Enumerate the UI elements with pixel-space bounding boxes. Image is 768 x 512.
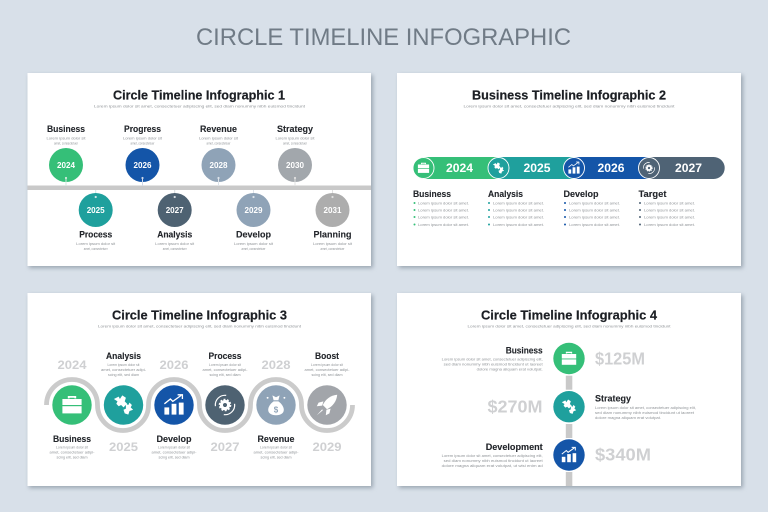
step: Business 2024: 2024 — [58, 358, 87, 372]
panel: circle timeline 3 — [28, 293, 373, 488]
milestone: Revenue 2028: Revenue — [200, 124, 237, 135]
column: Target — [638, 189, 695, 227]
milestone: Analysis 2027: Lorem ipsum dolor sit — [155, 241, 195, 246]
column: Business — [413, 189, 469, 227]
step: Boost 2029: Boost — [315, 351, 340, 362]
row: Development $340M — [442, 439, 651, 471]
column: Analysis: Analysis — [488, 189, 523, 200]
step: Analysis 2025: Analysis — [106, 351, 141, 362]
panel 4 subtitle: Lorem ipsum dolor sit amet, consectetuer adipiscing elit, sed diam nonummy nibh euismod tincidunt — [468, 324, 672, 328]
panel: circle timeline 4 — [397, 293, 743, 488]
step: Boost 2029 — [304, 351, 350, 454]
milestone: Strategy 2030: amet, consectetuer — [283, 140, 307, 146]
milestone: Business 2024: Lorem ipsum dolor sit — [46, 136, 86, 140]
column: Target: Lorem ipsum dolor sit amet. — [644, 214, 695, 220]
column: Analysis — [488, 189, 544, 227]
milestone: Analysis 2027 — [155, 190, 195, 251]
milestone: Process 2025: 2025 — [87, 205, 105, 215]
milestone: Revenue 2028: Lorem ipsum dolor sit — [199, 136, 239, 140]
milestone: Develop 2029: amet, consectetuer — [242, 246, 266, 251]
row: Strategy $270M: sed diam nonummy nibh euismod tincidunt ut laoreet — [595, 410, 695, 415]
step: Revenue 2028: $ — [274, 406, 279, 414]
milestone: Strategy 2030 — [276, 124, 315, 186]
row: Strategy $270M: dolore magna aliquam erat volutpat. — [595, 415, 661, 420]
milestone: Business 2024: Business — [47, 124, 85, 135]
step: Develop 2026: Lorem ipsum dolor sit — [158, 444, 191, 450]
row: Development $340M: sed diam nonummy nibh euismod tincidunt ut laoreet — [444, 458, 544, 463]
milestone: Analysis 2027: amet, consectetuer — [163, 246, 187, 251]
segment 2025: 2025 — [524, 161, 551, 175]
segment 2027 — [638, 158, 702, 178]
milestone: Process 2025: amet, consectetuer — [84, 246, 108, 251]
milestone: Strategy 2030: 2030 — [286, 160, 304, 170]
row: Business $125M: Lorem ipsum dolor sit amet, consectetuer adipiscing elit, — [442, 356, 543, 362]
step: Boost 2029: scing elit, sed diam — [312, 372, 343, 377]
step: Business 2024: Lorem ipsum dolor sit — [56, 444, 89, 450]
step: Boost 2029: Lorem ipsum dolor sit — [311, 362, 344, 367]
step: Process 2027: Lorem ipsum dolor sit — [209, 362, 242, 367]
row: Development $340M: $340M — [595, 444, 651, 464]
milestone: Business 2024: amet, consectetuer — [54, 140, 78, 146]
column: Develop: Lorem ipsum dolor sit amet. — [569, 214, 620, 220]
milestone: Strategy 2030: Lorem ipsum dolor sit — [276, 136, 315, 140]
milestone: Progress 2026: Lorem ipsum dolor sit — [123, 136, 163, 140]
timeline bar — [28, 186, 371, 190]
row: Business $125M — [442, 343, 645, 374]
panel: business timeline 2 — [397, 73, 743, 268]
step: Develop 2026: amet, consectetuer adipi- — [152, 450, 197, 454]
milestone: Planning 2031 — [313, 190, 353, 251]
segment 2027: 2027 — [675, 161, 702, 175]
row: Strategy $270M: Lorem ipsum dolor sit amet, consectetuer adipiscing elit, — [595, 405, 696, 410]
column: Analysis: Lorem ipsum dolor sit amet. — [493, 208, 544, 212]
milestone: Process 2025: Process — [79, 230, 112, 240]
milestone: Develop 2029: Lorem ipsum dolor sit — [234, 241, 274, 246]
step: Analysis 2025 — [101, 351, 147, 454]
milestone: Analysis 2027: Analysis — [157, 230, 192, 240]
column: Business: Business — [413, 189, 451, 200]
main title: CIRCLE TIMELINE INFOGRAPHIC — [196, 24, 571, 51]
column: Analysis: Lorem ipsum dolor sit amet. — [493, 200, 544, 206]
step: Develop 2026: Develop — [156, 434, 192, 445]
milestone: Revenue 2028: 2028 — [210, 160, 228, 170]
milestone: Planning 2031: amet, consectetuer — [320, 246, 345, 251]
step: Business 2024: amet, consectetuer adipi- — [50, 450, 95, 454]
column: Target: Lorem ipsum dolor sit amet. — [644, 200, 695, 206]
row: Development $340M: Lorem ipsum dolor sit amet, consectetuer adipiscing elit, — [442, 453, 543, 458]
column: Business: Lorem ipsum dolor sit amet. — [418, 214, 469, 220]
column: Develop — [564, 189, 620, 227]
column: Business: Lorem ipsum dolor sit amet. — [418, 200, 469, 206]
milestone: Planning 2031: Lorem ipsum dolor sit — [313, 241, 353, 246]
row: Strategy $270M — [488, 391, 696, 422]
panel 4 heading: Circle Timeline Infographic 4 — [481, 308, 658, 322]
step: Process 2027 — [202, 351, 248, 454]
column: Develop: Lorem ipsum dolor sit amet. — [569, 208, 620, 212]
panel 1 subtitle: Lorem ipsum dolor sit amet, consectetuer adipiscing elit, sed diam nonummy nibh euismod tincidunt — [94, 104, 306, 108]
milestone: Progress 2026 — [123, 124, 163, 186]
row: Business $125M: sed diam nonummy nibh euismod tincidunt ut laoreet — [444, 362, 544, 366]
step: Business 2024: scing elit, sed diam — [56, 454, 88, 460]
panel 2 heading: Business Timeline Infographic 2 — [472, 88, 666, 102]
milestone: Business 2024: 2024 — [57, 160, 75, 170]
wavy path — [46, 380, 352, 431]
milestone: Develop 2029: 2029 — [244, 205, 263, 215]
step: Process 2027: scing elit, sed diam — [210, 372, 241, 377]
column: Develop: Lorem ipsum dolor sit amet. — [569, 200, 620, 206]
step: Business 2024 — [50, 358, 95, 460]
step: Develop 2026: scing elit, sed diam — [158, 454, 190, 460]
milestone: Strategy 2030: Strategy — [277, 124, 314, 135]
milestone: Progress 2026: amet, consectetuer — [130, 140, 155, 146]
milestone: Develop 2029 — [234, 190, 274, 251]
column: Target: Lorem ipsum dolor sit amet. — [644, 222, 695, 227]
panel 2 subtitle: Lorem ipsum dolor sit amet, consectetuer adipiscing elit, sed diam nonummy nibh euismod tincidunt — [464, 104, 676, 108]
milestone: Develop 2029: Develop — [236, 230, 271, 240]
column: Target: Lorem ipsum dolor sit amet. — [644, 208, 695, 212]
segment 2026: 2026 — [598, 161, 625, 175]
step: Revenue 2028: 2028 — [262, 358, 291, 372]
step: Analysis 2025: amet, consectetuer adipi- — [101, 367, 147, 372]
step: Boost 2029: amet, consectetuer adipi- — [304, 367, 350, 372]
panel 3 subtitle: Lorem ipsum dolor sit amet, consectetuer adipiscing elit, sed diam nonummy nibh euismod tincidunt — [98, 324, 302, 328]
row: Development $340M: Development — [486, 442, 543, 453]
milestone: Revenue 2028 — [199, 124, 239, 186]
segmented timeline bar — [413, 157, 725, 179]
step: Analysis 2025: scing elit, sed diam — [108, 372, 140, 377]
column: Develop: Develop — [564, 189, 599, 200]
row: Business $125M: Business — [506, 346, 543, 356]
step: Boost 2029: 2029 — [312, 440, 342, 454]
milestone: Planning 2031: Planning — [314, 230, 352, 240]
row: Strategy $270M: Strategy — [595, 394, 632, 404]
milestone: Revenue 2028: amet, consectetuer — [206, 140, 231, 146]
row: Business $125M: dolore magna aliquam erat volutpat. — [477, 366, 543, 372]
milestone: Planning 2031: 2031 — [324, 205, 342, 215]
milestone: Process 2025: Lorem ipsum dolor sit — [76, 241, 116, 246]
segment 2025 — [488, 158, 551, 178]
milestone: Progress 2026: 2026 — [134, 160, 152, 170]
column: Business: Lorem ipsum dolor sit amet. — [418, 208, 469, 212]
step: Develop 2026 — [152, 358, 197, 460]
column: Develop: Lorem ipsum dolor sit amet. — [569, 222, 620, 227]
step: Process 2027: Process — [208, 351, 242, 362]
segment 2024 — [413, 158, 473, 178]
step: Revenue 2028 — [254, 358, 299, 460]
step: Analysis 2025: 2025 — [109, 440, 138, 454]
column: Analysis: Lorem ipsum dolor sit amet. — [493, 222, 544, 227]
panel: circle timeline 1 — [28, 73, 373, 268]
step: Develop 2026: 2026 — [160, 358, 189, 372]
column: Analysis: Lorem ipsum dolor sit amet. — [493, 214, 544, 220]
step: Process 2027: 2027 — [210, 440, 240, 454]
panel 1 heading: Circle Timeline Infographic 1 — [113, 88, 285, 102]
panel 3 heading: Circle Timeline Infographic 3 — [112, 308, 287, 322]
column: Business: Lorem ipsum dolor sit amet. — [418, 222, 469, 227]
milestone: Business 2024 — [46, 124, 86, 186]
step: Revenue 2028: scing elit, sed diam — [260, 454, 292, 460]
step: Revenue 2028: amet, consectetuer adipi- — [254, 450, 299, 454]
step: Process 2027: amet, consectetuer adipi- — [202, 367, 248, 372]
segment 2026 — [564, 158, 625, 178]
step: Revenue 2028: Lorem ipsum dolor sit — [260, 444, 293, 450]
row: Business $125M: $125M — [595, 348, 645, 368]
step: Analysis 2025: Lorem ipsum dolor sit — [108, 362, 140, 367]
row: Development $340M: dolore magna aliquam erat volutpat, ut wisi enim ad — [442, 463, 543, 468]
segment 2024: 2024 — [446, 161, 473, 175]
step: Revenue 2028: Revenue — [258, 434, 294, 445]
vertical connector — [566, 376, 572, 486]
milestone: Progress 2026: Progress — [124, 124, 161, 135]
milestone: Process 2025 — [76, 190, 116, 251]
step: Business 2024: Business — [53, 434, 91, 445]
column: Target: Target — [638, 189, 667, 200]
milestone: Analysis 2027: 2027 — [166, 205, 184, 215]
row: Strategy $270M: $270M — [488, 396, 542, 416]
